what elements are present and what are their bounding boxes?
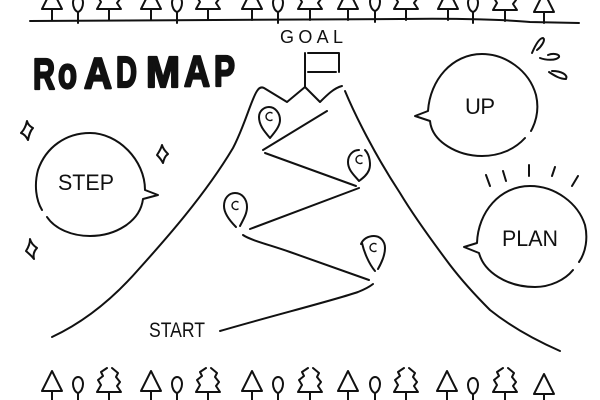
- map pin 2: [348, 150, 370, 181]
- emphasis ticks: [486, 165, 578, 186]
- speech bubble: up: UP: [465, 94, 495, 119]
- goal label: GOAL: [280, 27, 343, 47]
- title: P: [214, 47, 235, 96]
- speech bubble: up: [415, 54, 537, 156]
- bottom tree row: [42, 368, 554, 400]
- speech bubble: step: [36, 133, 158, 236]
- emphasis drops: [532, 38, 566, 79]
- speech bubble: step: STEP: [58, 170, 114, 195]
- title: A: [84, 49, 112, 98]
- title: A: [184, 47, 210, 96]
- top tree row: [42, 0, 554, 23]
- title: [33, 47, 235, 99]
- mountain outline: [52, 86, 560, 351]
- sparkle 2: [157, 145, 168, 163]
- map pin 1: [259, 107, 280, 138]
- title: R: [33, 50, 55, 99]
- sparkle 1: [21, 121, 33, 140]
- title: D: [116, 48, 137, 97]
- flag: [305, 53, 339, 87]
- zigzag route: [220, 111, 373, 331]
- start label: START: [149, 319, 205, 342]
- ground line: [30, 19, 579, 23]
- map pin 4: [361, 236, 385, 271]
- map pin 3: [224, 193, 247, 227]
- speech bubble: plan: PLAN: [502, 226, 558, 251]
- title: M: [146, 48, 180, 97]
- sparkle 3: [26, 239, 37, 259]
- speech bubble: plan: [464, 186, 586, 287]
- title: o: [58, 49, 77, 98]
